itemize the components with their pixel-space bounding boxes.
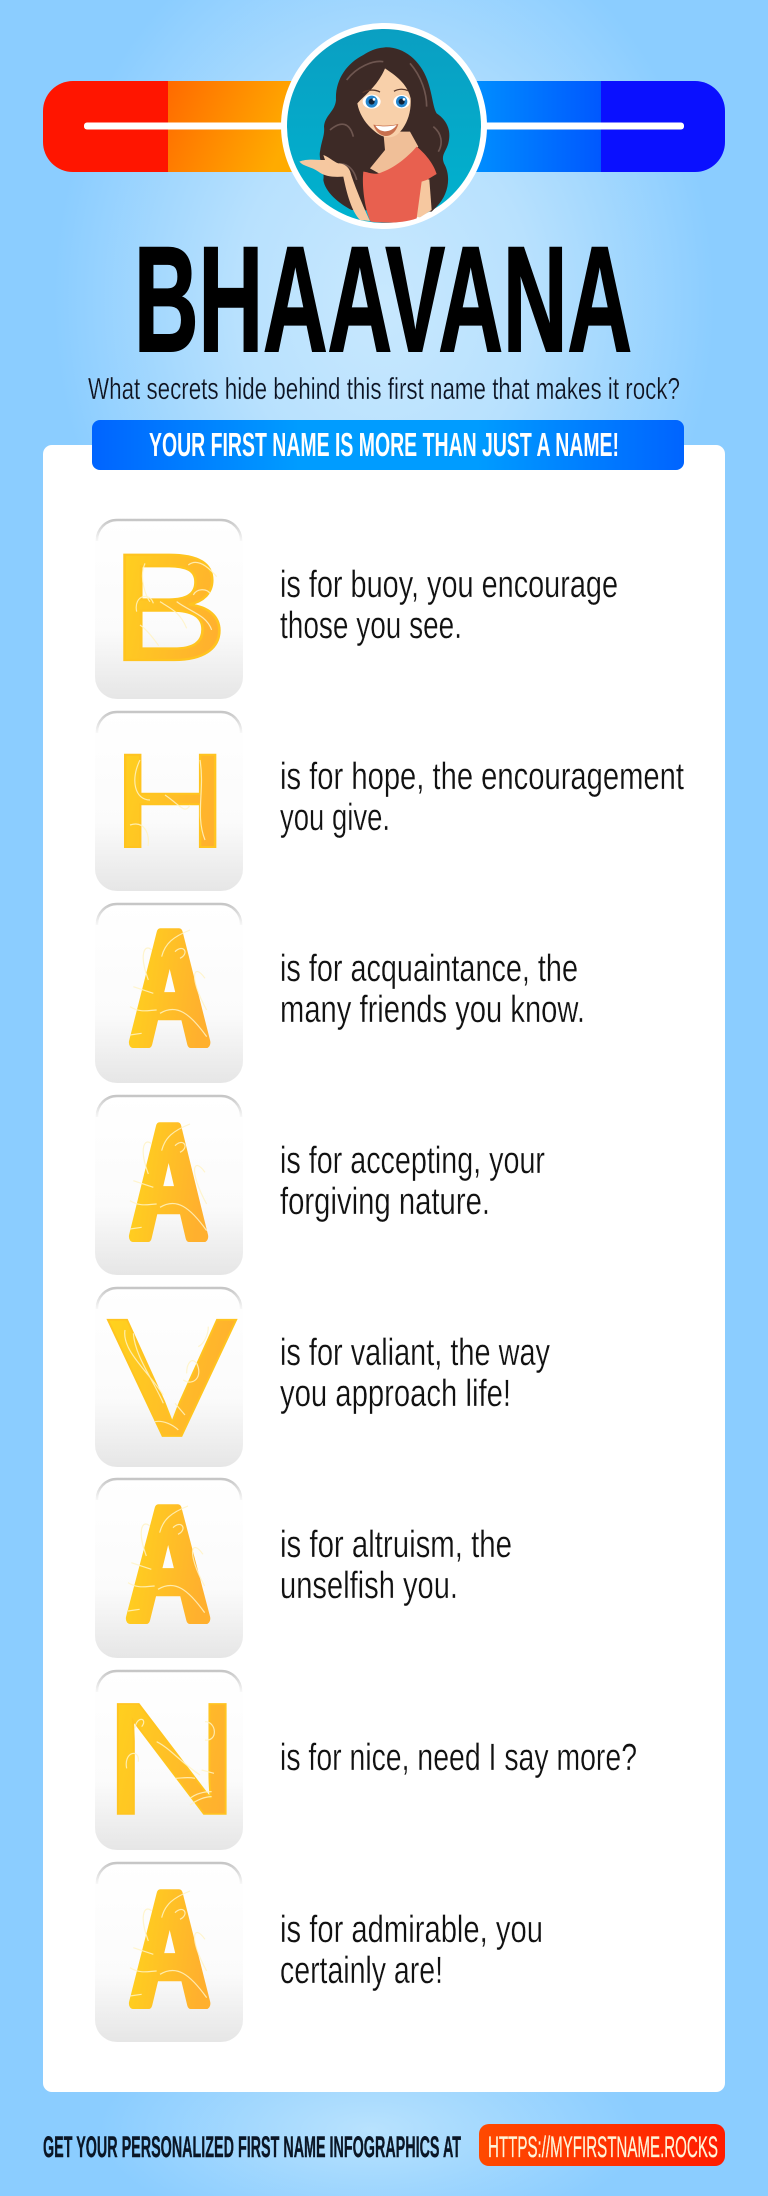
text: A: certainly are!	[280, 1950, 443, 1992]
face	[357, 68, 411, 137]
text: A	[280, 948, 585, 1031]
mouth	[373, 124, 398, 136]
row: A	[95, 1094, 545, 1275]
text: H	[280, 756, 684, 839]
right arm	[414, 179, 432, 217]
banner	[92, 420, 684, 470]
row: H	[95, 711, 684, 891]
footer url button	[479, 2124, 725, 2166]
row: V	[95, 1283, 550, 1472]
row: H: H	[112, 727, 228, 876]
text: A	[280, 1909, 543, 1992]
text: B	[280, 564, 618, 647]
avatar: smiling woman in circle	[281, 23, 487, 229]
text: V: is for valiant, the way	[280, 1332, 550, 1374]
text: A: many friends you know.	[280, 989, 585, 1031]
text: A: is for acquaintance, the	[280, 948, 578, 990]
hair	[320, 47, 449, 212]
text: B: those you see.	[280, 605, 462, 647]
eyes	[363, 95, 381, 109]
header bar	[43, 81, 725, 172]
text: A	[280, 1140, 545, 1223]
text: A	[280, 1524, 512, 1607]
text: V: you approach life!	[280, 1373, 511, 1415]
row: B	[95, 519, 618, 699]
text: A: is for admirable, you	[280, 1909, 543, 1951]
row: A	[95, 900, 585, 1083]
row: A	[95, 1861, 543, 2042]
white content panel	[43, 445, 725, 2092]
left arm and hand	[299, 155, 370, 221]
neck	[370, 132, 418, 174]
row: N	[95, 1670, 637, 1850]
text: H: you give.	[280, 797, 390, 839]
eyebrows	[363, 89, 408, 93]
row: A	[95, 1476, 512, 1658]
row: N: N	[102, 1670, 241, 1848]
row: A: A	[130, 900, 209, 1076]
shirt	[363, 147, 437, 223]
text: A: is for altruism, the	[280, 1524, 512, 1566]
text: A: unselfish you.	[280, 1565, 458, 1607]
row: A: A	[130, 1861, 209, 2037]
text: A: is for accepting, your	[280, 1140, 545, 1182]
text: N: is for nice, need I say more?	[280, 1737, 637, 1779]
row: V: V	[107, 1283, 237, 1472]
text: V	[280, 1332, 550, 1415]
row: A: A	[130, 1094, 207, 1270]
text: A: forgiving nature.	[280, 1181, 490, 1223]
text: B: is for buoy, you encourage	[280, 564, 618, 606]
row: B: B	[110, 523, 229, 693]
row: A: A	[127, 1476, 209, 1653]
